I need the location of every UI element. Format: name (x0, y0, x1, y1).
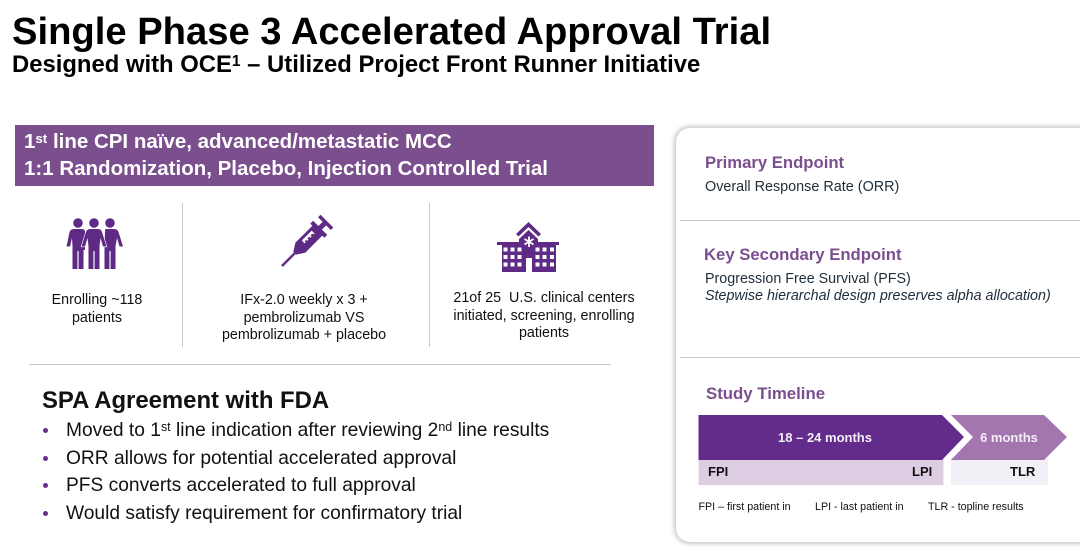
text: PFS (705, 271, 1051, 304)
text: treatment arms (222, 292, 386, 343)
text: clinical centers: 21of 25 U.S. clinical centers (453, 290, 635, 306)
text: PFS: Stepwise hierarchal design preserves alpha allocation) (705, 288, 1051, 304)
bar: TLR: TLR (1010, 464, 1036, 479)
arrow: 18-24 months: 18 – 24 months (778, 430, 872, 445)
bullet list: Moved to 1st line indication after reviewing 2nd line results (66, 420, 549, 441)
text: treatment arms: pembrolizumab + placebo (222, 327, 386, 343)
legend: abbreviations: LPI - last patient in (815, 501, 904, 513)
divider: section (29, 364, 611, 365)
bullet list: PFS converts accelerated to full approval (66, 475, 416, 496)
text: clinical centers (453, 290, 635, 341)
legend: abbreviations (698, 501, 1024, 513)
icon: hospital (497, 222, 559, 272)
banner: trial design: 1:1 Randomization, Placebo, Injection Controlled Trial (24, 157, 548, 180)
text: treatment arms: pembrolizumab VS (244, 310, 364, 326)
legend: abbreviations: TLR - topline results (928, 501, 1024, 513)
icon: patients (66, 218, 123, 269)
text: enrolling (52, 292, 142, 326)
heading: primary endpoint: Primary Endpoint (705, 153, 844, 172)
bar: TLR (951, 458, 1048, 485)
heading: SPA agreement: SPA Agreement with FDA (42, 387, 329, 414)
text: ORR: Overall Response Rate (ORR) (705, 179, 899, 195)
bullet list (43, 420, 549, 524)
divider: two (429, 203, 430, 347)
timeline chart (698, 415, 1067, 513)
text: treatment arms: IFx-2.0 weekly x 3 + (240, 292, 368, 308)
title: Single Phase 3 Accelerated Approval Trial (12, 10, 771, 53)
legend: abbreviations: FPI – first patient in (698, 501, 791, 513)
divider: timeline (680, 357, 1080, 358)
arrow: 6 months (951, 415, 1067, 460)
banner: trial design (15, 125, 654, 186)
divider: endpoints (680, 220, 1080, 221)
heading: secondary endpoint: Key Secondary Endpoint (704, 245, 902, 264)
bullet list: Would satisfy requirement for confirmatory trial (66, 503, 462, 524)
banner: trial design: 1st line CPI naïve, advanced/metastatic MCC (24, 130, 452, 153)
subtitle: Designed with OCE1 – Utilized Project Front Runner Initiative (12, 51, 700, 78)
arrow: 18-24 months (698, 415, 964, 460)
text: enrolling: patients (72, 310, 122, 326)
bar: FPI to LPI: LPI (912, 464, 932, 479)
text: clinical centers: patients (519, 325, 569, 341)
text: clinical centers: initiated, screening, enrolling (453, 308, 635, 324)
bar: FPI to LPI (698, 458, 944, 485)
divider: one (182, 203, 183, 347)
text: PFS: Progression Free Survival (PFS) (705, 271, 911, 287)
bullet list: ORR allows for potential accelerated approval (66, 448, 456, 469)
icon: syringe (281, 214, 334, 267)
panel: endpoints and timeline (676, 128, 1080, 542)
bar: FPI to LPI: FPI (708, 464, 728, 479)
heading: study timeline: Study Timeline (706, 384, 825, 403)
text: enrolling: Enrolling ~118 (52, 292, 142, 308)
arrow: 6 months: 6 months (980, 430, 1038, 445)
